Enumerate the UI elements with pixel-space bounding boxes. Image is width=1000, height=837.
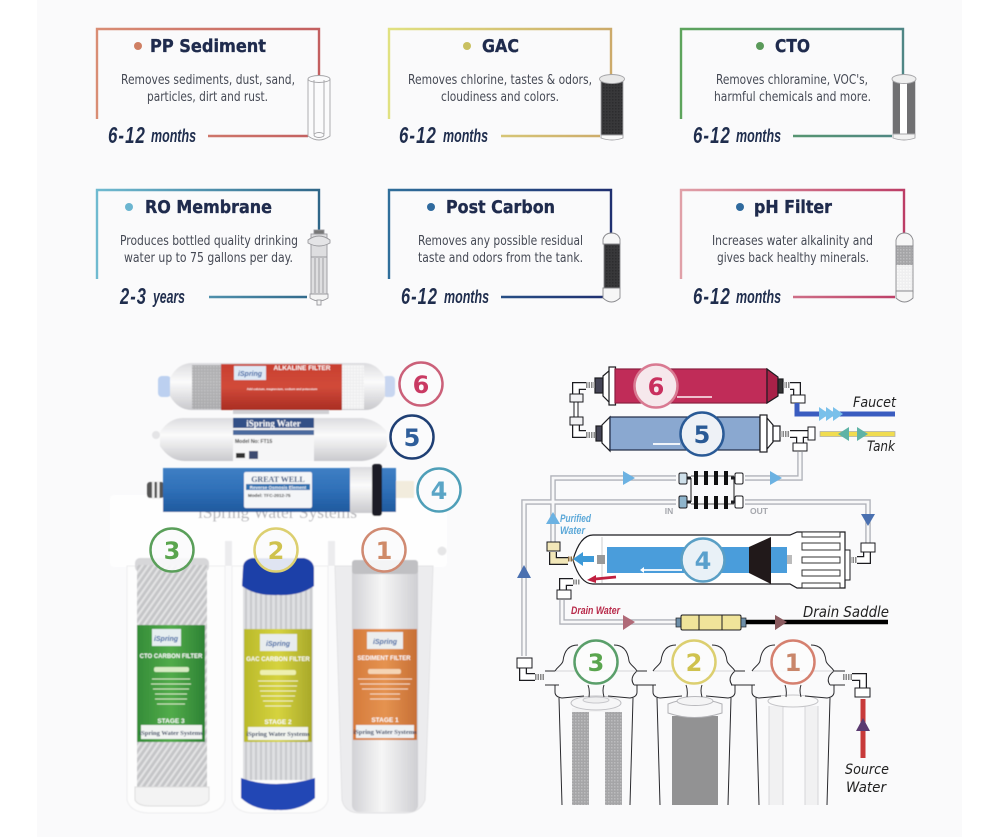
- badge: photo stage 3: [150, 528, 194, 572]
- badge: photo stage 6: [400, 362, 442, 406]
- diagram: outlet fitting: [517, 658, 545, 677]
- panel: GAC: cloudiness and colors.: [441, 89, 559, 105]
- photo: housing stage 2: [232, 558, 328, 813]
- badge: photo stage 4: 4: [431, 477, 447, 505]
- photo: stage 4 RO membrane: Reverse Osmosis Element: [250, 485, 307, 490]
- photo: stage 5 post carbon filter: Model No: FT15: [235, 439, 272, 445]
- photo: housing stage 3: iSpring Water Systems: [139, 730, 203, 737]
- panel: pH Filter: gives back healthy minerals.: [717, 250, 869, 266]
- diagram: stage 6 cartridge: [595, 367, 783, 405]
- icon: CTO cartridge: [892, 74, 916, 140]
- panel: GAC: GAC: [482, 37, 519, 57]
- photo: stage 6 alkaline filter: ALKALINE FILTER: [274, 365, 331, 372]
- badge: photo stage 5: [390, 416, 434, 458]
- photo: housing stage 2: STAGE 2: [264, 719, 292, 726]
- icon: post carbon cartridge: [603, 233, 620, 302]
- panel: CTO: Removes chloramine, VOC's,: [716, 72, 868, 88]
- diagram: flow valves: [679, 471, 743, 509]
- badge: diagram stage 5: [680, 412, 724, 456]
- label: Purified Water: Water: [560, 525, 586, 537]
- panel: pH Filter: Increases water alkalinity and: [712, 233, 873, 249]
- photo: stage 5 post carbon filter: [152, 418, 387, 461]
- icon: pH cartridge: [896, 233, 913, 302]
- panel: RO Membrane: [97, 190, 330, 309]
- photo: housing stage 1: [335, 560, 433, 813]
- panel: Post Carbon: Post Carbon: [446, 198, 555, 218]
- panel: pH Filter: months: [736, 287, 781, 307]
- photo: housing stage 1: SEDIMENT FILTER: [357, 656, 411, 662]
- panel: GAC: months: [443, 126, 488, 146]
- badge: diagram stage 6: 6: [648, 373, 664, 401]
- arrow: stage 6 flow: [677, 396, 712, 398]
- diagram: connecting pipes between housings: [545, 671, 845, 685]
- diagram: source water inlet: [843, 677, 889, 796]
- panel: PP Sediment: 6-12: [108, 122, 146, 148]
- panel: PP Sediment: months: [151, 126, 196, 146]
- photo: stage 4 RO membrane: [147, 464, 414, 516]
- panel: Post Carbon: Removes any possible residual: [418, 233, 583, 249]
- panel: PP Sediment: particles, dirt and rust.: [147, 89, 268, 105]
- icon: clear sediment cartridge: [308, 76, 330, 140]
- diagram: drain line: [557, 582, 889, 630]
- photo: housing stage 2: GAC CARBON FILTER: [246, 657, 310, 663]
- diagram: stage 4 RO vessel: [547, 532, 875, 588]
- badge: diagram stage 2: 2: [686, 649, 702, 677]
- label: Purified Water: Purified: [560, 513, 591, 525]
- photo: stage 5 post carbon filter: iSpring Water: [246, 418, 301, 428]
- panel: Post Carbon: months: [444, 287, 489, 307]
- diagram: tank line: [780, 427, 895, 455]
- label: Purified Water: [560, 513, 591, 537]
- photo: housing stage 3: STAGE 3: [157, 718, 185, 725]
- panel: PP Sediment: PP Sediment: [150, 37, 266, 57]
- badge: photo stage 5: 5: [404, 424, 420, 452]
- badge: photo stage 4: [418, 468, 460, 512]
- badge: diagram stage 2: [672, 640, 716, 684]
- photo: stage 6 alkaline filter: iSpring: [238, 371, 263, 378]
- diagram: drain line: Drain Saddle: [803, 603, 889, 621]
- diagram: drain line: Drain Water: [571, 605, 621, 617]
- badge: diagram stage 3: [574, 640, 618, 684]
- photo: white mounting bracket: [110, 495, 447, 567]
- panel: CTO: months: [736, 126, 781, 146]
- badge: diagram stage 5: 5: [694, 421, 710, 449]
- photo: housing stage 2: iSpring Water Systems: [246, 731, 310, 738]
- panel: GAC: 6-12: [399, 122, 437, 148]
- diagram: faucet line: Faucet: [853, 395, 897, 411]
- diagram: tubing: [524, 452, 868, 656]
- panel: PP Sediment: Removes sediments, dust, sand,: [121, 72, 295, 88]
- photo: housing stage 1: STAGE 1: [371, 717, 399, 724]
- arrow: stage 5 flow: [653, 443, 680, 445]
- photo: filter system: [110, 363, 447, 813]
- panel: Post Carbon: taste and odors from the tank.: [418, 250, 583, 266]
- panel: RO Membrane: RO Membrane: [145, 198, 272, 218]
- badge: photo stage 6: 6: [413, 371, 429, 399]
- photo: stage 6 alkaline filter: [158, 363, 395, 414]
- badge: photo stage 1: 1: [376, 537, 392, 565]
- badge: photo stage 2: 2: [268, 537, 284, 565]
- diagram: stage 5 cartridge: [596, 415, 780, 452]
- diagram: flow arrows: [517, 471, 875, 630]
- panel: pH Filter: [681, 190, 913, 309]
- photo: housing stage 3: iSpring: [154, 636, 179, 643]
- panel: CTO: 6-12: [693, 122, 731, 148]
- badge: diagram stage 4: [682, 538, 724, 582]
- panel: CTO: [681, 29, 916, 148]
- badge: photo stage 3: 3: [164, 537, 180, 565]
- diagram: faucet line: [783, 385, 897, 421]
- panel: RO Membrane: years: [152, 287, 185, 307]
- badge: diagram stage 3: 3: [588, 649, 604, 677]
- photo: white mounting bracket: iSpring Water Systems: [198, 503, 357, 522]
- panel: Post Carbon: [389, 190, 620, 309]
- diagram: stage 1 housing: [752, 645, 834, 805]
- diagram: stage 3 housing: [555, 645, 637, 805]
- photo: stage 6 alkaline filter: Add calcium, magnesium, sodium and potassium: [247, 387, 318, 391]
- photo: housing stage 2: iSpring: [266, 641, 291, 648]
- panel: pH Filter: 6-12: [693, 283, 731, 309]
- diagram: stage 2 housing: [653, 645, 735, 805]
- panel: PP Sediment: [97, 29, 330, 148]
- photo: stage 4 RO membrane: GREAT WELL: [251, 475, 305, 484]
- diagram: fittings between stage 5 and 6: [570, 385, 595, 435]
- panel: pH Filter: pH Filter: [754, 198, 832, 218]
- badge: diagram stage 1: 1: [785, 649, 801, 677]
- icon: RO membrane cartridge: [308, 230, 330, 305]
- panel: Post Carbon: 6-12: [401, 283, 438, 309]
- badge: photo stage 1: [362, 528, 406, 572]
- panel: RO Membrane: 2-3: [119, 283, 147, 309]
- diagram: water flow schematic: [517, 364, 897, 805]
- panel: RO Membrane: Produces bottled quality drinking: [120, 233, 298, 249]
- panel: CTO: harmful chemicals and more.: [714, 89, 871, 105]
- icon: carbon cartridge: [600, 74, 624, 140]
- badge: diagram stage 4: 4: [695, 547, 711, 575]
- photo: housing stage 3: [127, 558, 225, 813]
- panel: CTO: CTO: [775, 37, 810, 57]
- diagram: tank line: Tank: [867, 439, 895, 455]
- panel: GAC: Removes chlorine, tastes & odors,: [408, 72, 592, 88]
- badge: diagram stage 6: [634, 364, 678, 408]
- panel: GAC: [389, 29, 624, 148]
- diagram: source water inlet: Water: [846, 780, 887, 796]
- photo: housing stage 1: iSpring: [373, 639, 398, 646]
- label: OUT: OUT: [750, 506, 769, 516]
- label: IN: IN: [665, 506, 673, 516]
- photo: housing stage 1: iSpring Water Systems: [353, 729, 417, 736]
- photo: stage 4 RO membrane: Model: TFC-2012-75: [248, 493, 291, 498]
- diagram: source water inlet: Source: [845, 762, 889, 778]
- photo: housing stage 3: CTO CARBON FILTER: [140, 654, 203, 660]
- badge: diagram stage 1: [772, 640, 814, 684]
- panel: RO Membrane: water up to 75 gallons per day.: [124, 250, 293, 266]
- badge: photo stage 2: [254, 528, 298, 572]
